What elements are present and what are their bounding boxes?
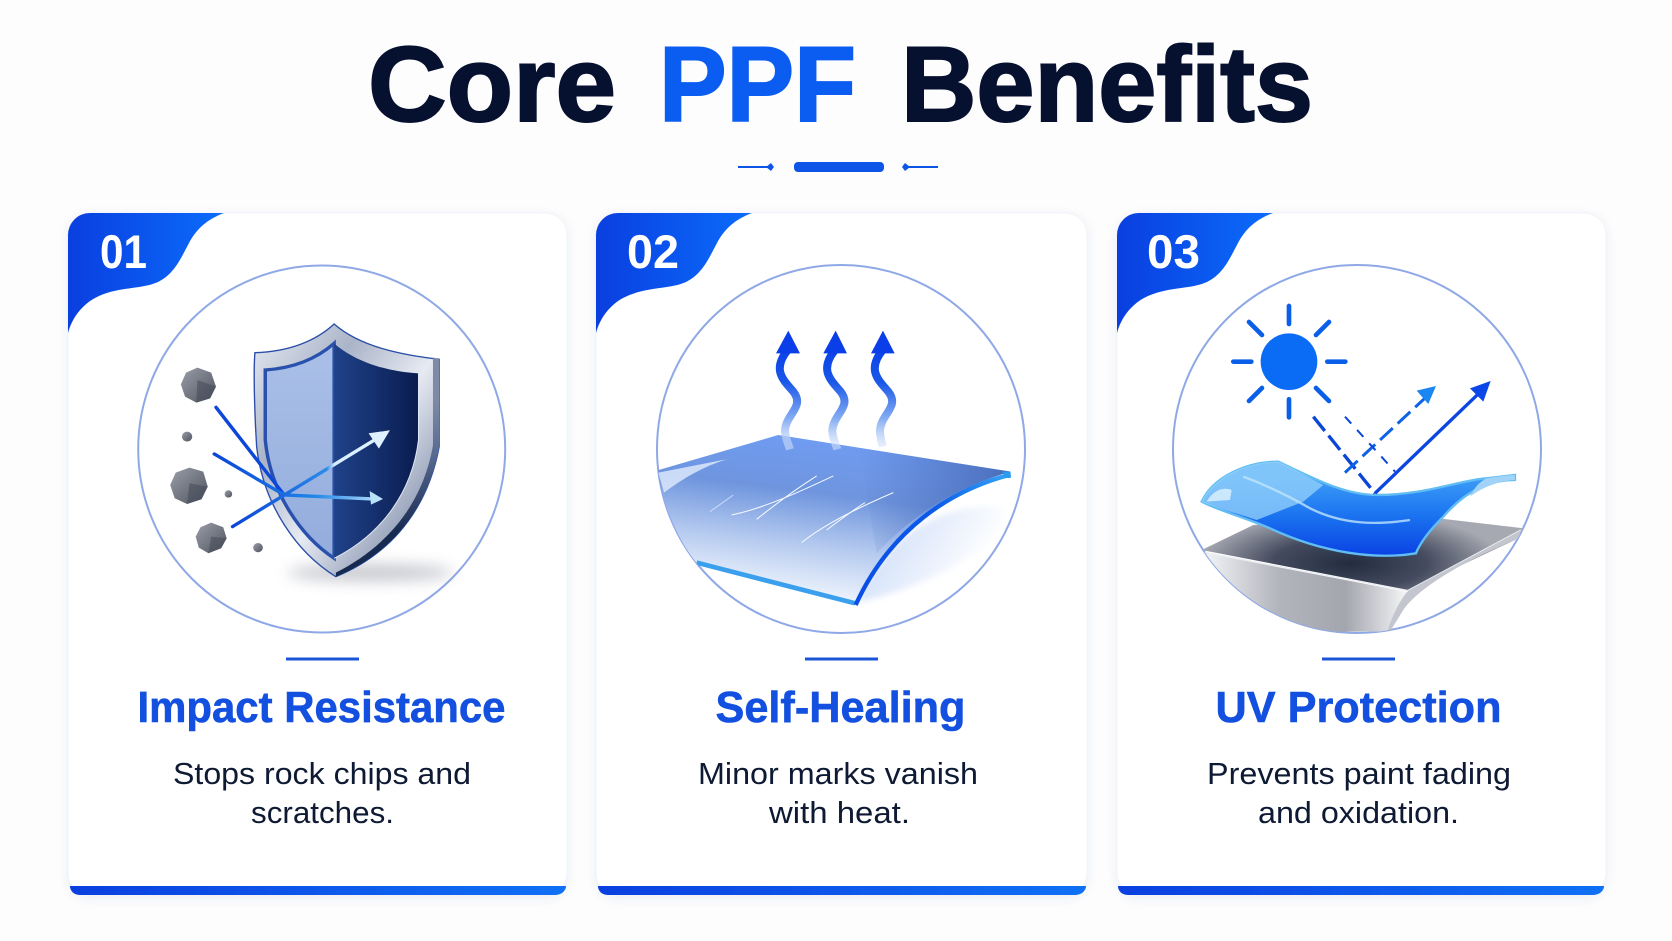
heading: UV Protection [1216, 683, 1502, 732]
icon circle [657, 265, 1025, 633]
title: Core [368, 24, 616, 144]
bottom bar [598, 886, 1086, 895]
card background [596, 213, 1087, 895]
description: scratches. [251, 795, 394, 830]
icon circle [1173, 265, 1541, 633]
divider [805, 658, 878, 660]
title ornament [738, 162, 938, 172]
divider [286, 658, 359, 660]
description: Stops rock chips and [173, 756, 471, 791]
bottom bar [70, 886, 566, 895]
description [698, 756, 978, 830]
panel: impact resistance [68, 213, 567, 895]
description: and oxidation. [1258, 795, 1459, 830]
title: PPF [659, 24, 856, 144]
card background [1117, 213, 1606, 895]
description: Prevents paint fading [1207, 756, 1511, 791]
divider [1322, 658, 1395, 660]
icon circle [138, 266, 505, 632]
sun [1233, 306, 1345, 417]
description: Minor marks vanish [698, 756, 978, 791]
description: with heat. [768, 795, 910, 830]
number tab [68, 213, 224, 333]
number tab [596, 213, 752, 333]
number tab [1117, 213, 1273, 333]
icon: shield with deflected rocks [170, 324, 453, 581]
bottom bar [1118, 886, 1604, 895]
reflection arrows [1313, 381, 1491, 493]
description [173, 756, 471, 830]
card background [68, 213, 567, 895]
icon: healing film with heat arrows [653, 331, 1011, 605]
description [1207, 756, 1511, 830]
heading: Self-Healing [716, 683, 966, 732]
number tab: 02 [627, 225, 679, 278]
number tab: 03 [1147, 225, 1200, 278]
heading: Impact Resistance [138, 683, 506, 732]
title [368, 24, 1313, 144]
title: Benefits [901, 24, 1313, 144]
panel: uv protection [1117, 213, 1606, 895]
number tab: 01 [100, 225, 147, 278]
panel: self-healing [596, 213, 1087, 895]
film sheet [1202, 462, 1515, 556]
icon: sun rays reflected off film [1202, 306, 1523, 632]
